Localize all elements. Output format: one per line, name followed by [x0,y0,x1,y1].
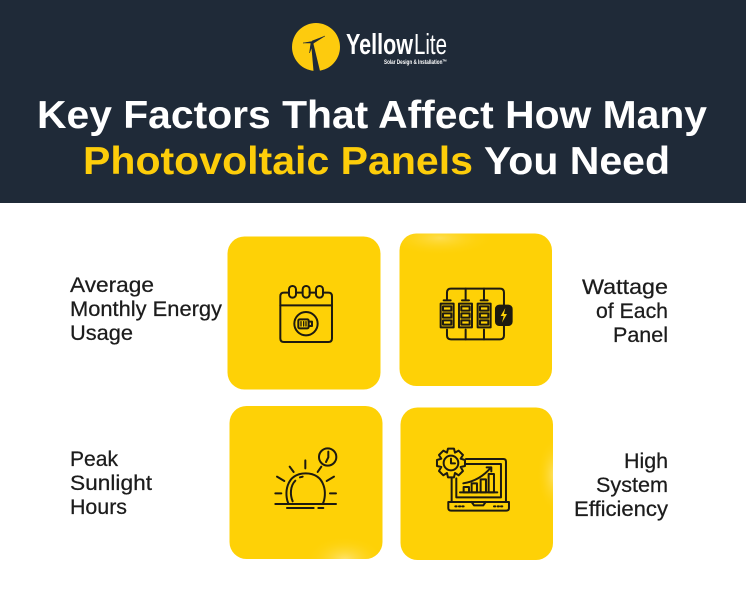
label: Usage [70,322,133,345]
icon: calendar with battery [280,286,332,342]
label: Wattage [582,276,668,299]
title [37,94,707,183]
icon: solar panel array [441,289,512,339]
label: Sunlight [70,472,152,495]
logo: YellowLite [292,23,447,71]
label [574,450,669,521]
card [230,406,382,559]
label: System [596,474,668,497]
logo wordmark: Yellow [346,29,413,61]
icon: sun on horizon with clock [275,448,336,508]
title: Key Factors That Affect How Many [37,94,707,137]
label: Efficiency [574,498,669,521]
label: Hours [70,496,127,519]
card [228,236,380,390]
panel: high system efficiency [400,408,669,560]
label: Panel [613,324,668,347]
label: Monthly Energy [70,298,223,321]
panel: wattage of each panel [400,234,668,386]
label: High [624,450,668,473]
title: You Need [484,140,670,183]
label: of Each [596,300,668,323]
logo: YellowLite: Lite [414,29,447,61]
label: Peak [70,448,118,471]
label [70,448,152,519]
title: Photovoltaic Panels [83,140,473,183]
icon: wind turbine sun [292,23,340,71]
logo tagline: Solar Design & Installation™ [384,59,447,66]
panel: average monthly energy usage [70,236,380,390]
label [582,276,668,347]
header banner [0,0,746,203]
card [400,408,553,560]
label: Average [70,274,154,297]
label [70,274,223,345]
card [400,234,552,386]
panel: peak sunlight hours [70,406,382,559]
icon: laptop with gear and chart [437,449,509,511]
